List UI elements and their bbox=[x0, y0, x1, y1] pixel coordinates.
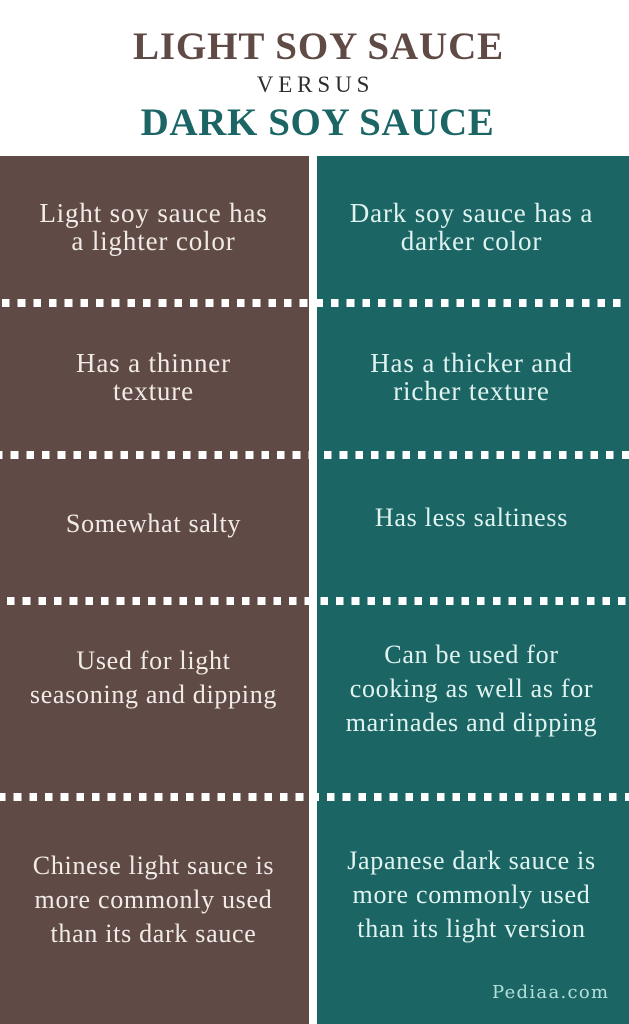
title: light soy sauce: LIGHT SOY SAUCE bbox=[133, 25, 504, 68]
text: chinese light sauce: more commonly used bbox=[35, 885, 272, 914]
title: dark soy sauce: DARK SOY SAUCE bbox=[141, 101, 494, 144]
text: less saltiness: Has less saltiness bbox=[375, 503, 568, 532]
text: japanese dark sauce: than its light version bbox=[357, 914, 586, 943]
text: dark color bbox=[350, 198, 593, 256]
text: thinner texture bbox=[76, 348, 231, 406]
panel: light soy sauce column bbox=[0, 156, 309, 1024]
text: cooking use: Can be used for bbox=[384, 640, 559, 669]
dotted divider 2 bbox=[0, 451, 629, 459]
dotted divider 3 bbox=[7, 597, 629, 605]
text: chinese light sauce: than its dark sauce bbox=[50, 919, 257, 948]
text: cooking use bbox=[346, 640, 597, 737]
versus label: VERSUS bbox=[257, 72, 374, 97]
watermark: Pediaa.com: Pediaa.com bbox=[492, 982, 609, 1003]
panel: dark soy sauce column bbox=[317, 156, 629, 1024]
text: thicker texture: Has a thicker and bbox=[370, 348, 573, 378]
text: light color: a lighter color bbox=[71, 226, 236, 256]
dotted divider 1 bbox=[2, 299, 629, 307]
text: thicker texture: richer texture bbox=[393, 376, 550, 406]
text: japanese dark sauce: Japanese dark sauce is bbox=[347, 846, 596, 875]
text: japanese dark sauce bbox=[347, 846, 596, 943]
text: thinner texture: texture bbox=[113, 376, 194, 406]
text: japanese dark sauce: more commonly used bbox=[353, 880, 590, 909]
text: light seasoning: Used for light bbox=[76, 646, 231, 675]
text: dark color: Dark soy sauce has a bbox=[350, 198, 593, 228]
text: somewhat salty: Somewhat salty bbox=[66, 509, 241, 538]
text: cooking use: marinades and dipping bbox=[346, 708, 597, 737]
text: dark color: darker color bbox=[401, 226, 542, 256]
text: light seasoning bbox=[30, 646, 277, 709]
text: chinese light sauce bbox=[33, 851, 274, 948]
text: cooking use: cooking as well as for bbox=[350, 674, 593, 703]
text: thinner texture: Has a thinner bbox=[76, 348, 231, 378]
text: light color bbox=[39, 198, 268, 256]
text: chinese light sauce: Chinese light sauce is bbox=[33, 851, 274, 880]
dotted divider 4 bbox=[0, 793, 629, 801]
text: light color: Light soy sauce has bbox=[39, 198, 268, 228]
text: light seasoning: seasoning and dipping bbox=[30, 680, 277, 709]
text: thicker texture bbox=[370, 348, 573, 406]
